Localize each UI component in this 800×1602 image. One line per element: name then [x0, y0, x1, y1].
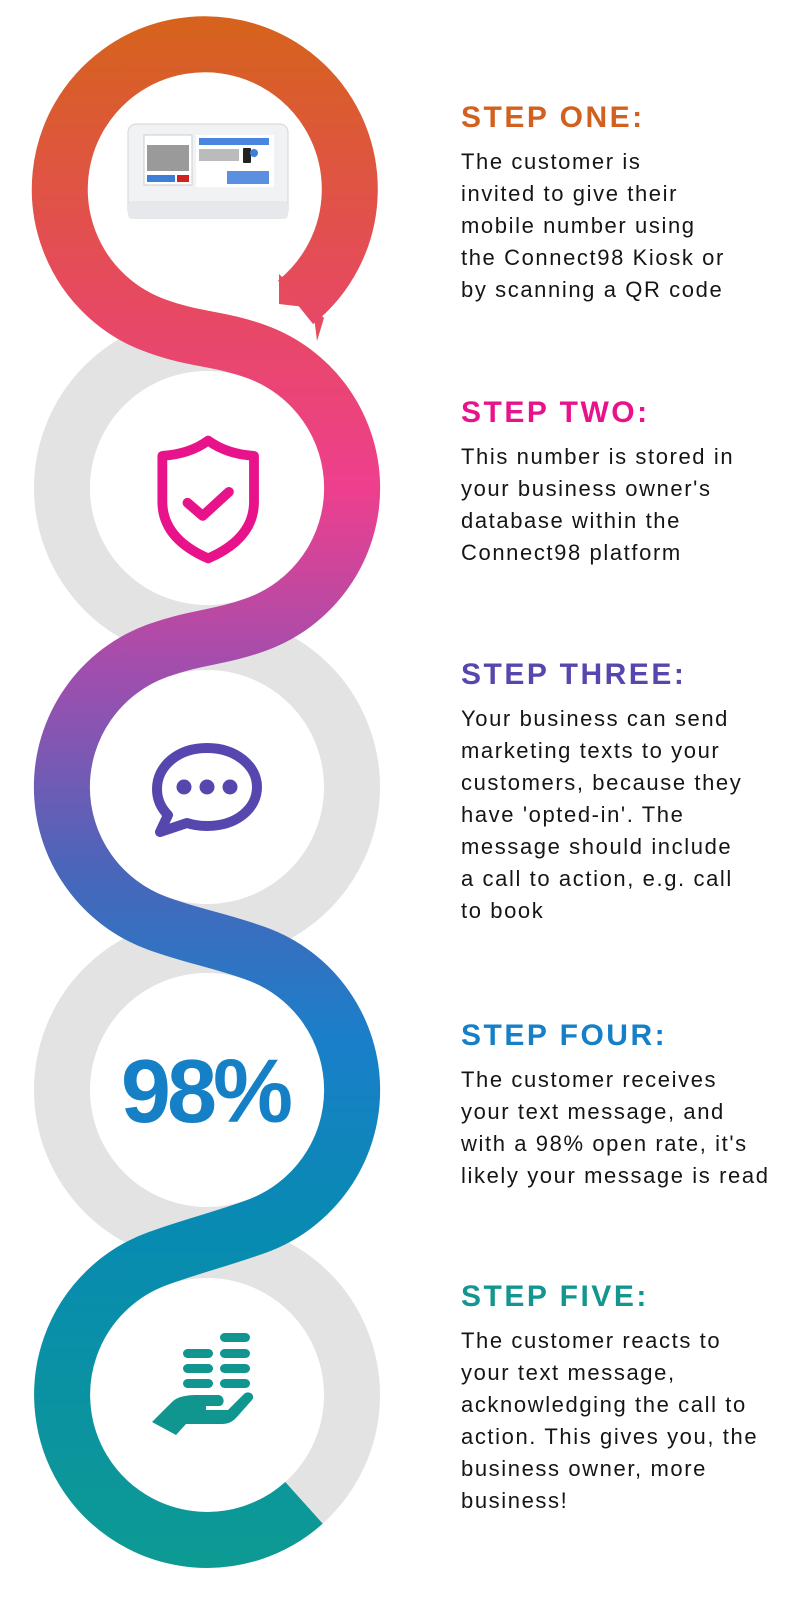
text: step five: business owner, more — [461, 1456, 707, 1481]
text: step one: invited to give their — [461, 181, 678, 206]
text: step four: likely your message is read — [461, 1163, 770, 1188]
text: step three — [461, 658, 742, 923]
icon: hand with coins — [152, 1333, 254, 1435]
text: step three: STEP THREE: — [461, 658, 686, 691]
text: step five: The customer reacts to — [461, 1328, 721, 1353]
text: step three: have 'opted-in'. The — [461, 802, 684, 827]
text: step three: customers, because they — [461, 770, 742, 795]
text: step two: This number is stored in — [461, 444, 734, 469]
text: step four: your text message, and — [461, 1099, 725, 1124]
text: step three: Your business can send — [461, 706, 729, 731]
text: step three: marketing texts to your — [461, 738, 720, 763]
colored ribbon — [60, 44, 352, 1540]
text: step two: Connect98 platform — [461, 540, 682, 565]
text: step four: with a 98% open rate, it's — [461, 1131, 748, 1156]
icon: chat bubble — [152, 743, 262, 837]
text: step three: message should include — [461, 834, 732, 859]
text: step five: business! — [461, 1488, 568, 1513]
text: step one: STEP ONE: — [461, 101, 645, 134]
icon: 98%: 98% — [121, 1042, 289, 1142]
text: step three: a call to action, e.g. call — [461, 866, 733, 891]
icon: shield — [157, 436, 259, 564]
text: step one: the Connect98 Kiosk or — [461, 245, 725, 270]
text: step three: to book — [461, 898, 544, 923]
icon: kiosk — [128, 124, 288, 219]
text: step two: database within the — [461, 508, 681, 533]
text: step one — [461, 101, 725, 302]
text: step five: STEP FIVE: — [461, 1280, 649, 1313]
text: step five: acknowledging the call to — [461, 1392, 747, 1417]
text: step one: mobile number using — [461, 213, 696, 238]
text: step one: by scanning a QR code — [461, 277, 723, 302]
gray rings — [62, 343, 352, 1540]
text: step five: your text message, — [461, 1360, 676, 1385]
text: step four — [461, 1019, 770, 1188]
ribbon tail point — [279, 274, 324, 341]
text: step two: your business owner's — [461, 476, 712, 501]
text: step five — [461, 1280, 758, 1513]
text: step one: The customer is — [461, 149, 642, 174]
text: step two — [461, 396, 734, 565]
text: step four: The customer receives — [461, 1067, 717, 1092]
text: step two: STEP TWO: — [461, 396, 650, 429]
text: step five: action. This gives you, the — [461, 1424, 758, 1449]
text: step four: STEP FOUR: — [461, 1019, 667, 1052]
